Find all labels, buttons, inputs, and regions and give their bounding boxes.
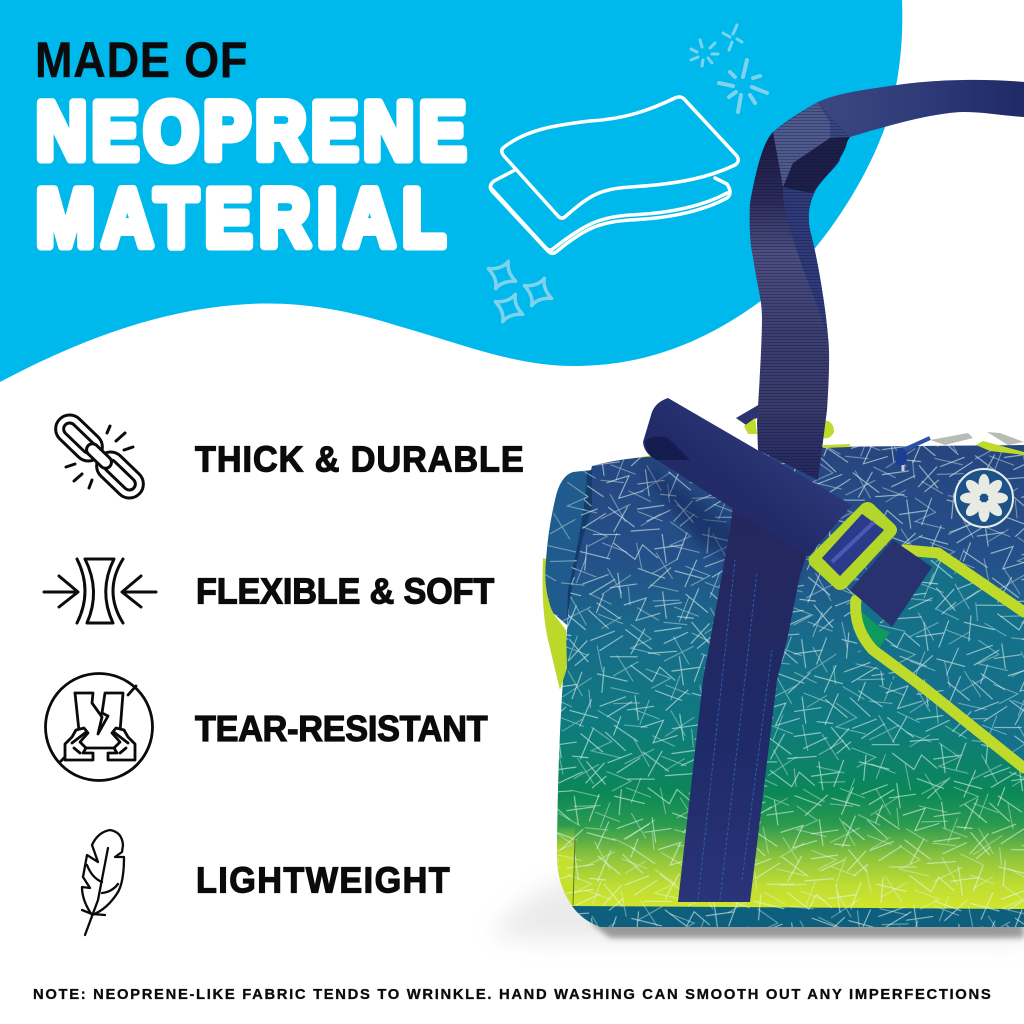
back handle loop: [736, 404, 760, 425]
icon: sparkle bursts: [691, 25, 767, 112]
yellow rear sliver: [625, 455, 660, 462]
left side panel: [545, 470, 592, 625]
yellow buckle: [808, 502, 897, 590]
yellow back trim: [744, 418, 834, 438]
teal base strip: [572, 906, 1024, 927]
strap shadow on body: [644, 466, 732, 562]
yellow corner fold: [557, 825, 575, 905]
vertical bottom strap: [678, 490, 812, 902]
title: neoprene material: MATERIAL: [36, 173, 445, 264]
yellow side piping: [543, 558, 567, 690]
title: neoprene material: NEOPRENE: [36, 86, 466, 177]
shoulder handle: [750, 80, 1024, 480]
top strap: [818, 80, 1024, 138]
feature: tear-resistant: TEAR-RESISTANT: [195, 709, 488, 749]
pocket inner green: [860, 610, 890, 650]
icon: broken chain link: [50, 409, 149, 504]
weave texture: [750, 102, 850, 480]
corner seam: [573, 838, 575, 905]
feature: thick and durable: THICK & DURABLE: [195, 440, 524, 480]
scratch print: [545, 445, 1024, 927]
handle dark pocket: [783, 138, 847, 193]
icon: no tearing: [46, 674, 152, 780]
bag photo: [490, 80, 1024, 940]
pocket piping: [856, 550, 1024, 768]
feature: lightweight: LIGHTWEIGHT: [196, 861, 450, 901]
handle highlight fold: [773, 102, 830, 187]
title: neoprene material: [36, 86, 466, 264]
handle right fold: [783, 145, 840, 337]
icon: stacked neoprene sheets: [490, 97, 738, 253]
icon: feather: [82, 830, 124, 935]
icon: compression arrows: [44, 559, 156, 623]
feature: flexible and soft: FLEXIBLE & SOFT: [196, 572, 495, 612]
note: NOTE: NEOPRENE-LIKE FABRIC TENDS TO WRINKLE. HAND WASHING CAN SMOOTH OUT ANY IMPERFECTIONS: [33, 987, 992, 1003]
side panel shade: [567, 470, 592, 625]
front pocket: [852, 548, 1024, 768]
title: made of: MADE OF: [35, 33, 247, 89]
icon: small sparkles: [482, 255, 558, 328]
bag body: [557, 445, 1024, 927]
zipper pull: [823, 432, 1024, 471]
diagonal strap with loop: [643, 398, 932, 627]
blue wave banner: [0, 0, 902, 382]
soft ground shadow: [490, 880, 1024, 940]
contact shadow: [590, 922, 1024, 938]
handle main band: [750, 102, 850, 480]
pocket print: [866, 555, 1024, 768]
logo badge: [955, 469, 1013, 527]
